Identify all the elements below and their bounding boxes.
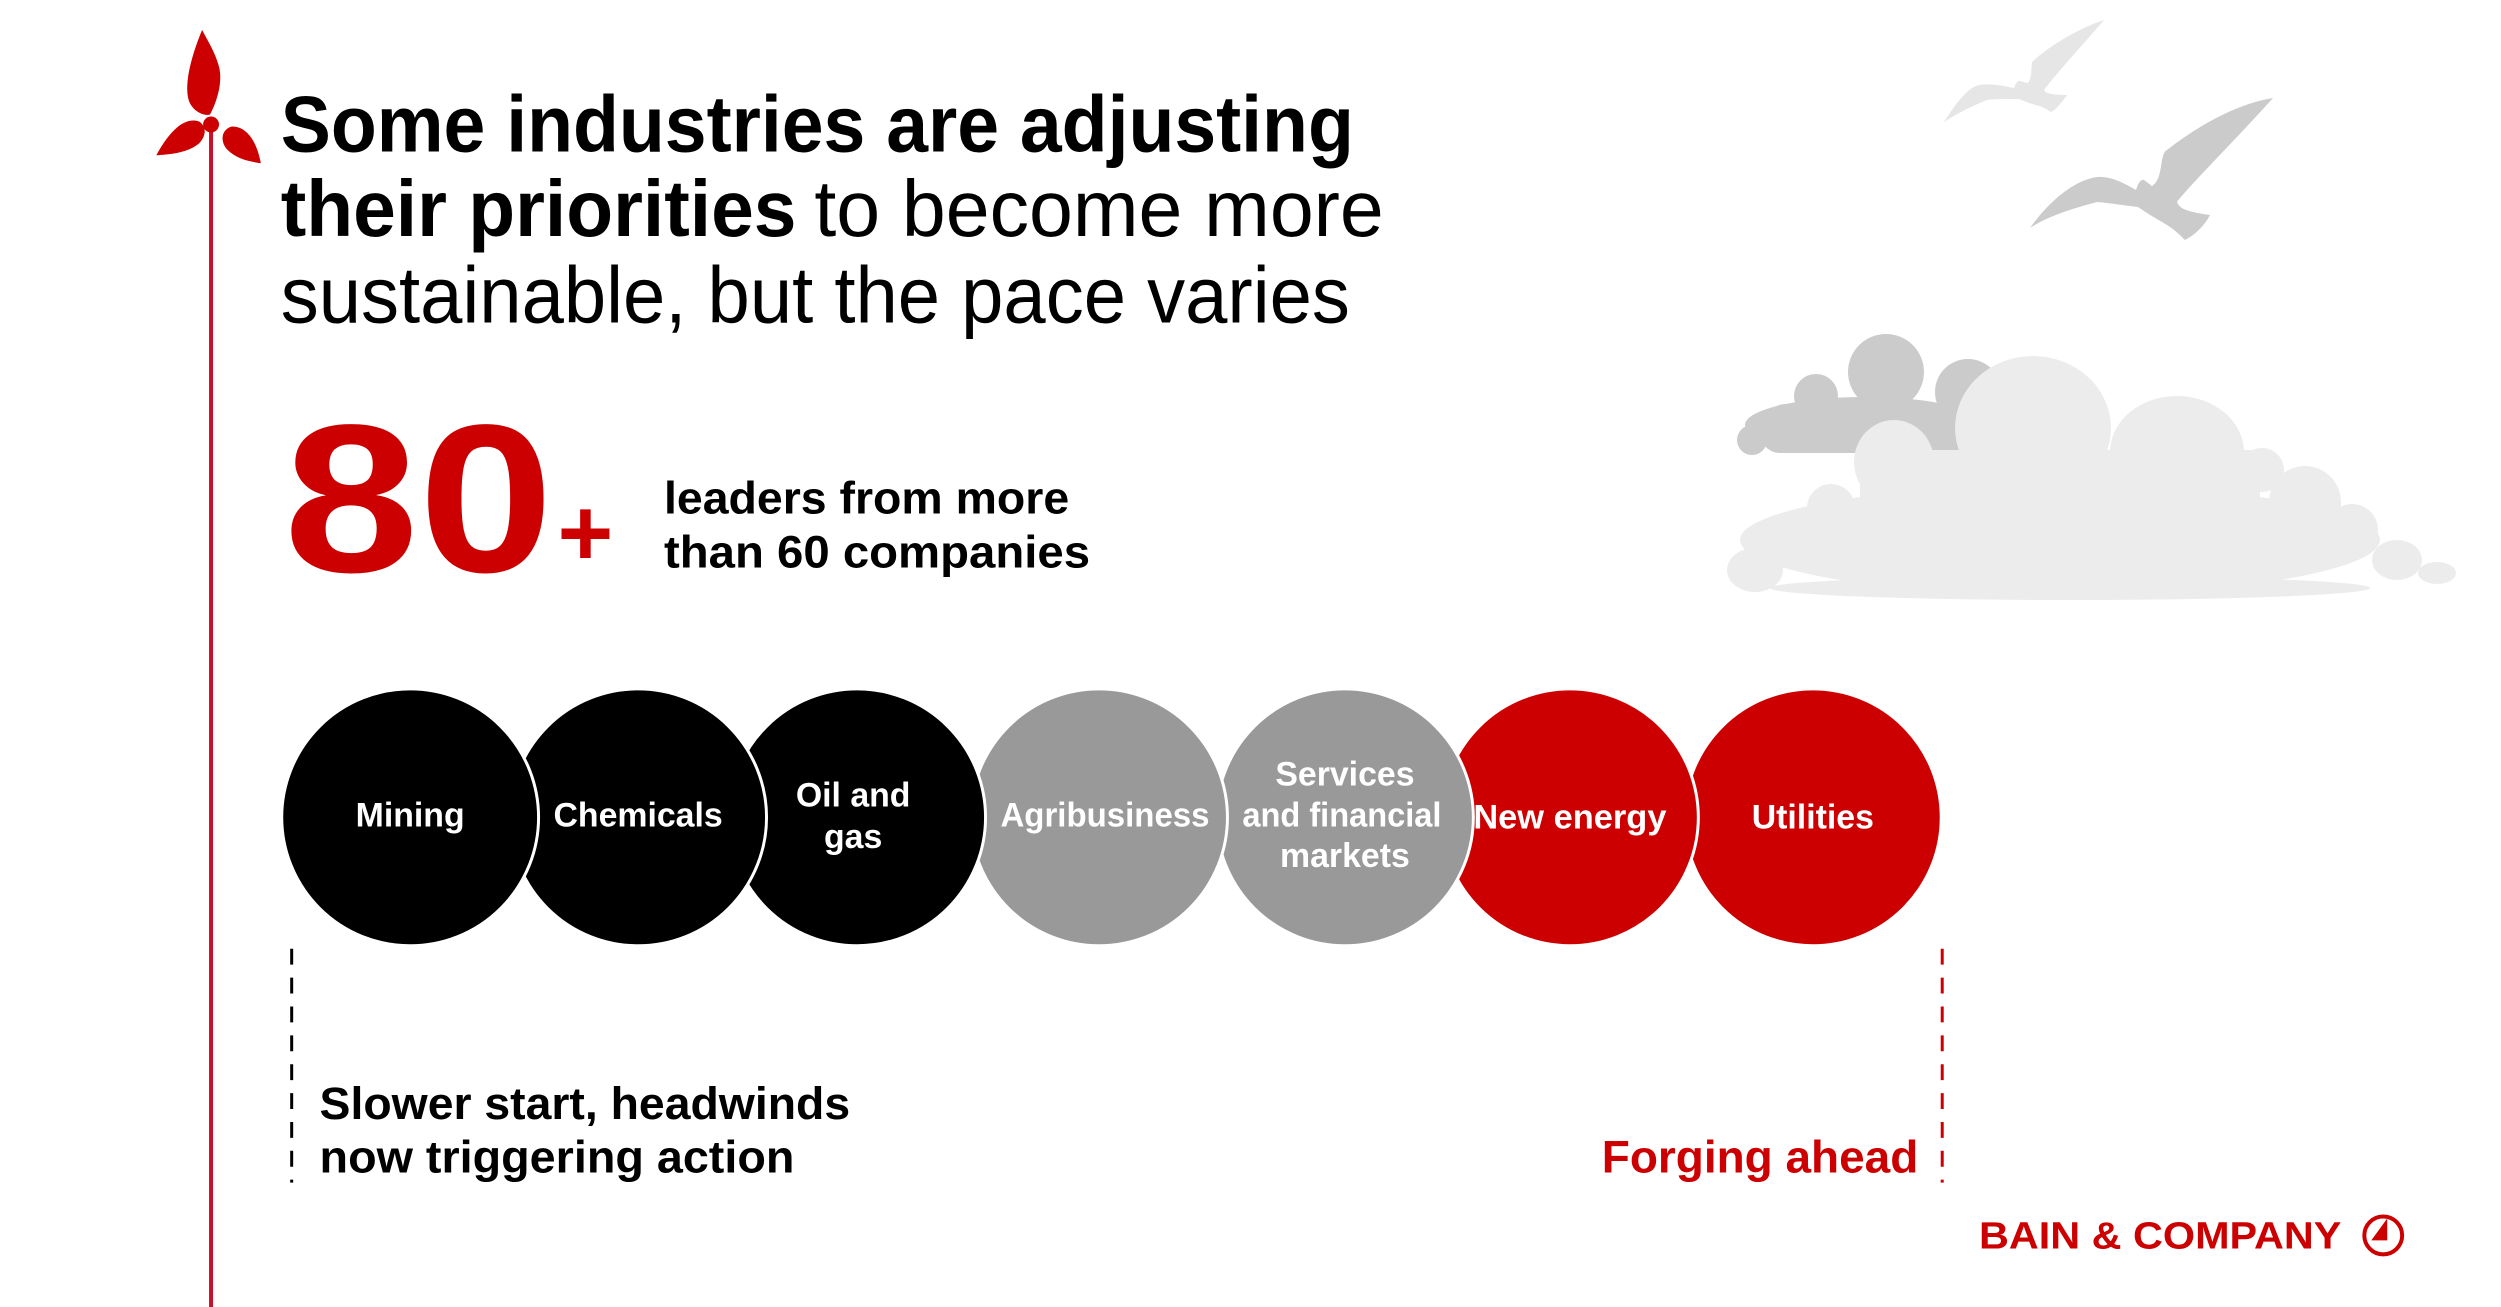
stat description: than 60 companies — [664, 526, 1090, 577]
dashed line right — [1941, 949, 1944, 1183]
title — [281, 79, 1384, 340]
stat description — [664, 473, 1090, 577]
label: services: markets — [1280, 837, 1410, 875]
big stat: 80+: 80 — [284, 380, 553, 616]
label: mining: Mining — [356, 796, 465, 834]
title: sustainable, but the pace varies — [281, 251, 1350, 340]
label: chemicals: Chemicals — [553, 796, 723, 834]
stat description: leaders from more — [664, 473, 1069, 524]
icon: wind turbine with pole — [156, 30, 261, 1307]
label: oil and gas: Oil and — [796, 776, 910, 814]
title: their priorities — [281, 164, 796, 253]
label: services: and financial — [1242, 796, 1441, 834]
circles: industries — [282, 689, 1941, 946]
label: oil and gas: gas — [824, 818, 882, 856]
title: to become more — [814, 164, 1384, 253]
clouds — [1727, 334, 2456, 600]
label: new energy: New energy — [1473, 798, 1667, 836]
logo: Bain & Company: BAIN & COMPANY — [1979, 1215, 2341, 1257]
text: forging ahead: Forging ahead — [1602, 1132, 1918, 1183]
label: agribusiness: Agribusiness — [1000, 796, 1210, 834]
label: services: Services — [1275, 755, 1415, 793]
text: slower start: now triggering action — [320, 1132, 794, 1183]
birds — [1944, 20, 2273, 240]
text: slower start — [320, 1078, 850, 1183]
label: utilities: Utilities — [1752, 798, 1874, 836]
text: slower start: Slower start, headwinds — [320, 1078, 850, 1129]
title: Some industries are adjusting — [281, 79, 1354, 168]
big stat: 80+: + — [557, 479, 613, 586]
dashed line left — [290, 949, 293, 1183]
